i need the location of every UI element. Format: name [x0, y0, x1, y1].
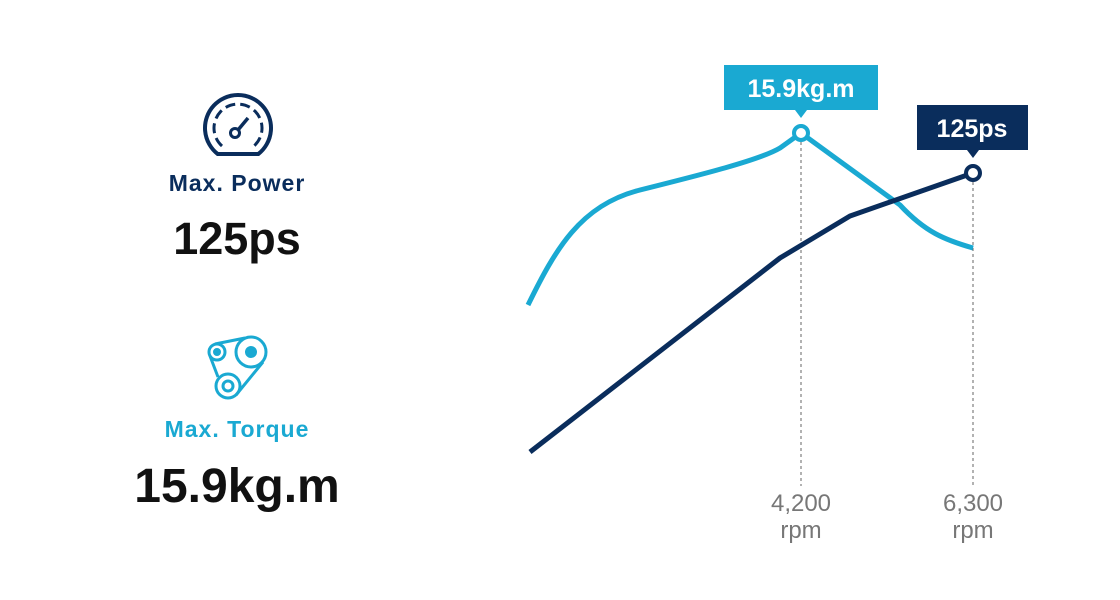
chart: torque and power curves: 15.9kg.m — [747, 75, 855, 103]
label: max torque: Max. Torque — [165, 416, 309, 442]
icon: speedometer — [203, 93, 273, 156]
chart: torque and power curves: 6,300 — [943, 490, 1003, 517]
chart: torque and power curves: rpm — [780, 517, 822, 544]
chart: torque and power curves: 125ps — [937, 115, 1007, 143]
label: max power: Max. Power — [169, 170, 305, 196]
chart: torque and power curves: rpm — [952, 517, 994, 544]
chart: torque and power curves: 4,200 — [771, 490, 831, 517]
icon: belt pulleys — [208, 336, 268, 400]
value: torque: 15.9kg.m — [134, 460, 340, 513]
value: power: 125ps — [173, 213, 301, 264]
